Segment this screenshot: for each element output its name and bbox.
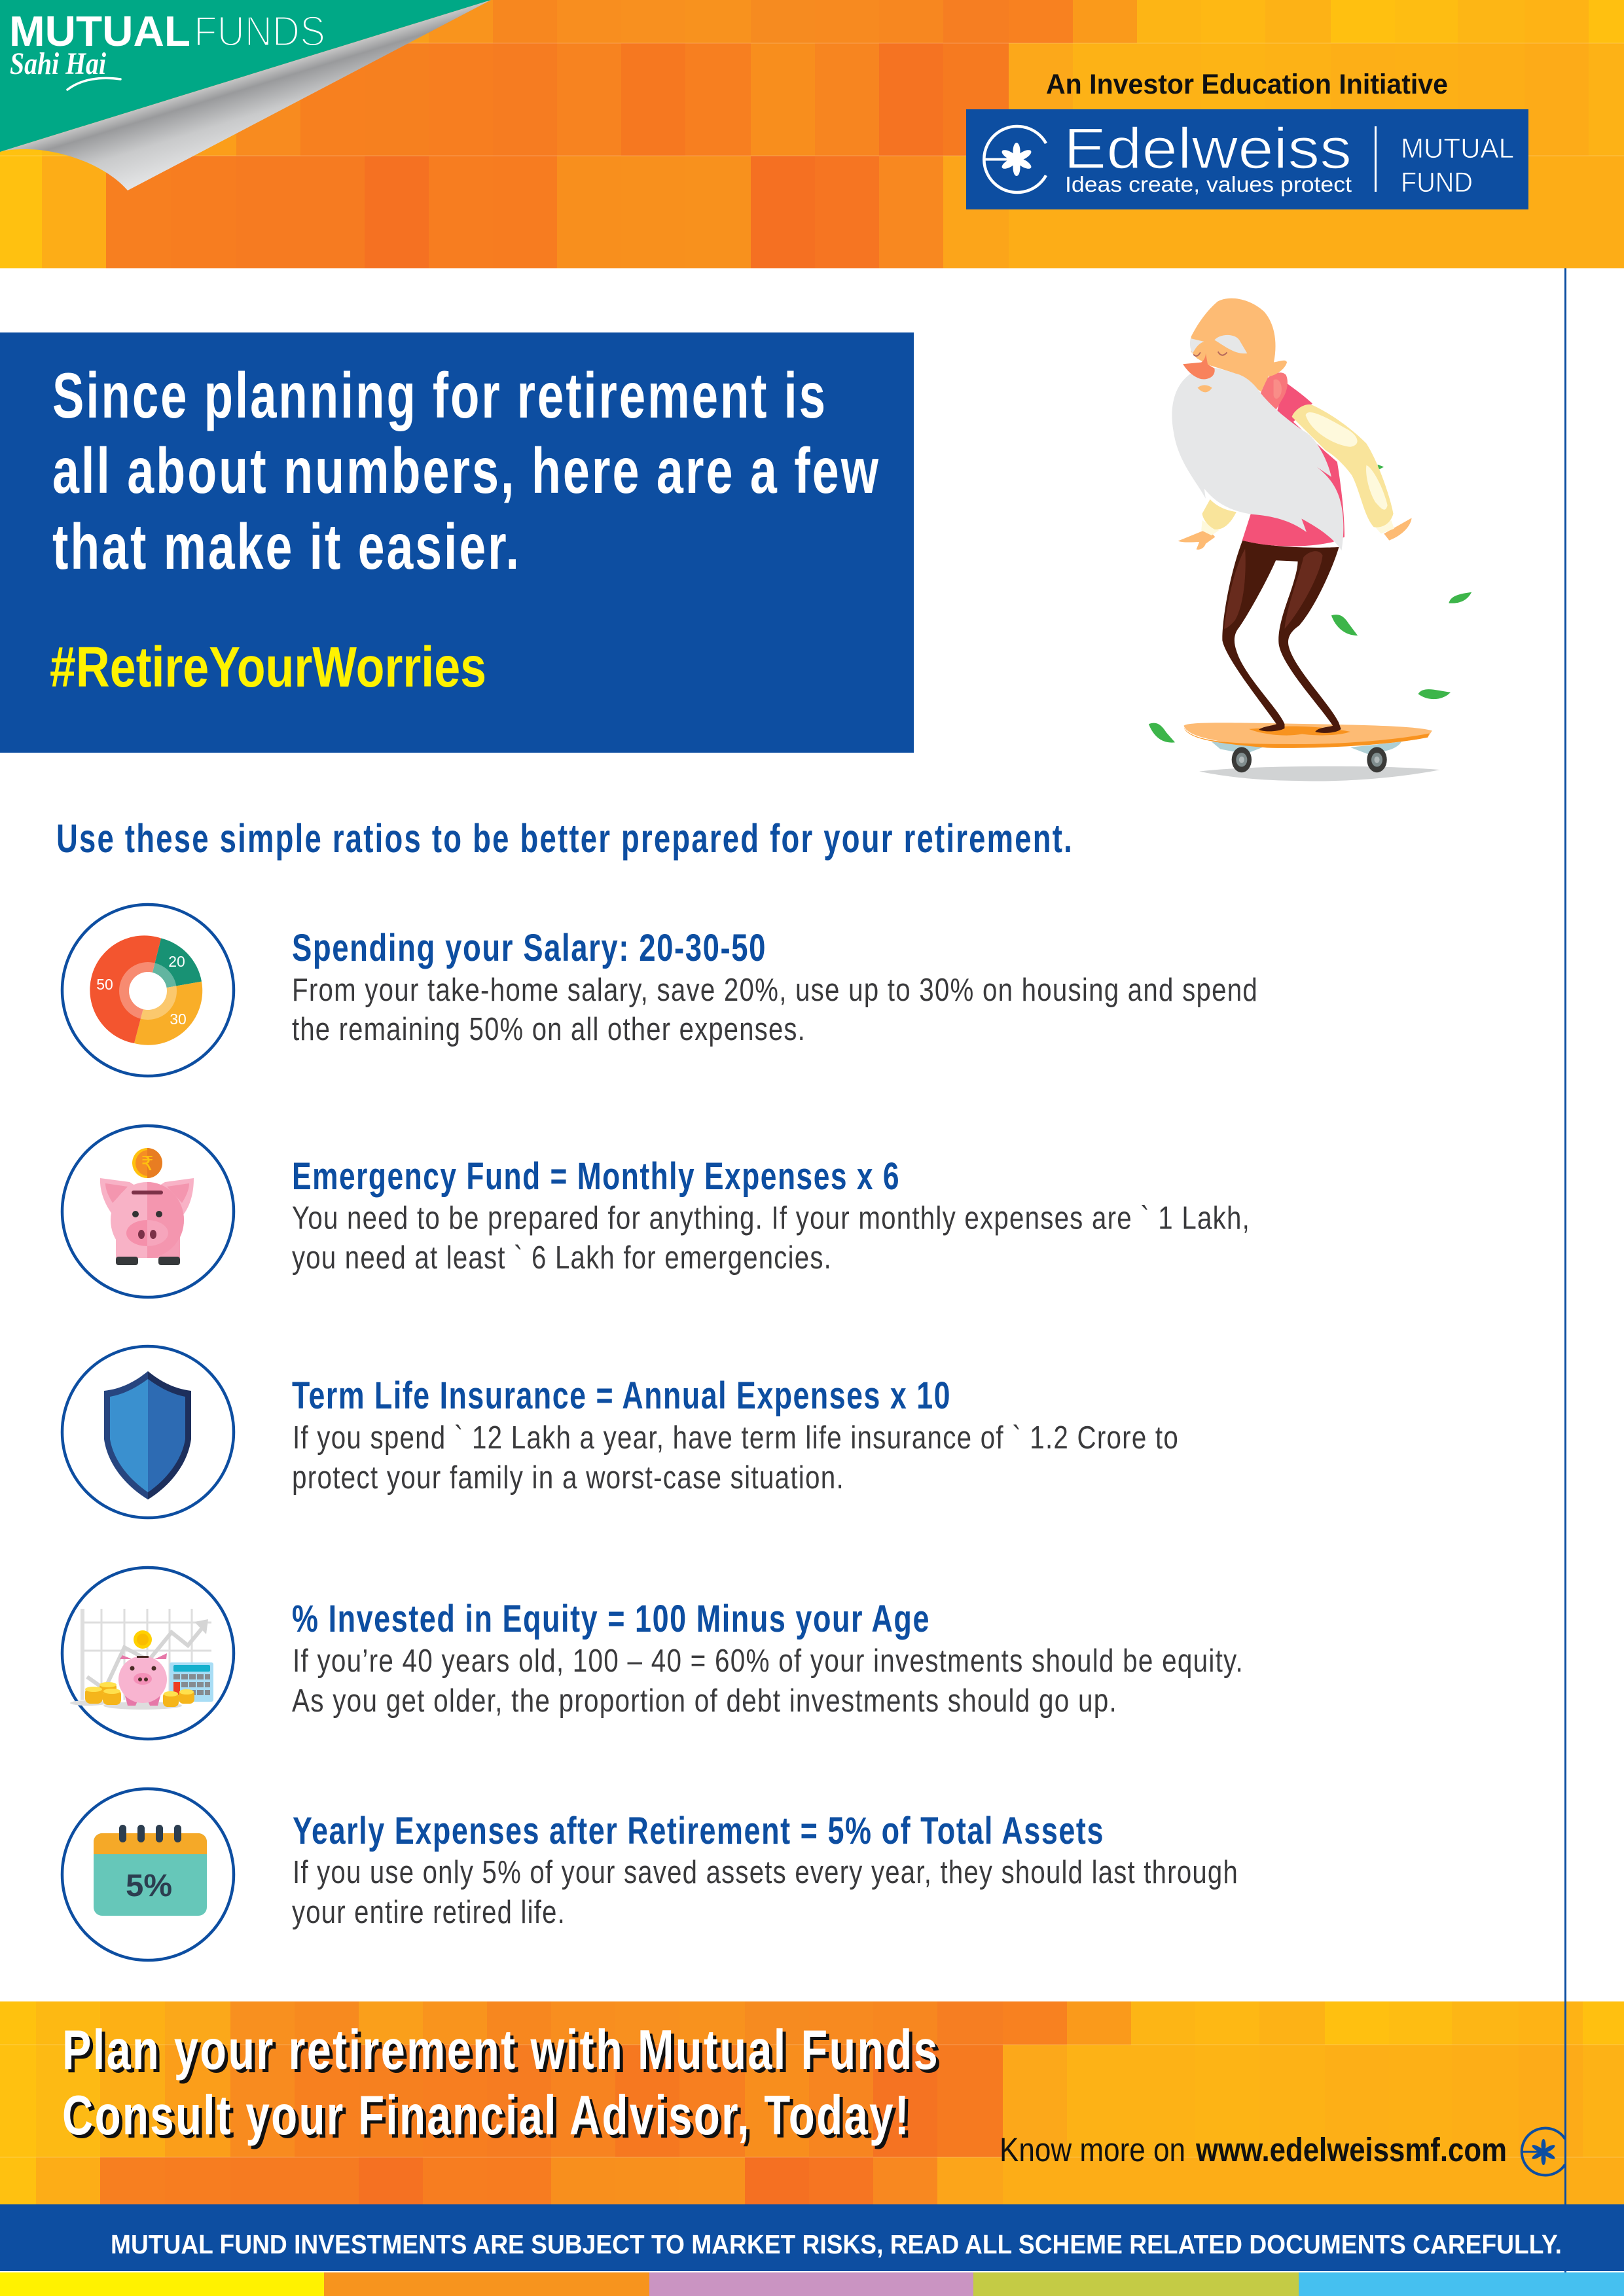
trousers (1222, 541, 1341, 733)
vertical rule over banner (1564, 2001, 1566, 2205)
call-to-action banner (0, 2001, 1624, 2204)
disclaimer bar (0, 2204, 1624, 2271)
left arm (1178, 499, 1236, 550)
illustration: old man on skateboard (1149, 298, 1471, 781)
description (292, 1643, 1244, 1719)
description (292, 1855, 1238, 1930)
ratio 2: emergency fund (62, 1126, 1250, 1297)
vertical rule (1564, 268, 1566, 2272)
green corner flag (0, 0, 491, 152)
skateboard (1183, 723, 1432, 772)
description: If you use only 5% of your saved assets every year, they should last through (293, 1855, 1238, 1890)
heading: Spending your Salary: 20-30-50 (292, 927, 767, 969)
banner text (62, 2019, 939, 2147)
icon: donut chart: 50 (96, 976, 113, 993)
subheading: Use these simple ratios to be better prepared for your retirement. (56, 816, 1074, 861)
banner text: Consult your Financial Advisor, Today! (62, 2085, 911, 2147)
description (292, 1200, 1250, 1276)
ratio 5: yearly expenses after retirement (62, 1789, 1238, 1960)
description: the remaining 50% on all other expenses. (292, 1012, 806, 1047)
hashtag: #RetireYourWorries (50, 636, 486, 699)
logo: Mutual Funds Sahi Hai (9, 7, 325, 90)
website line (1000, 2131, 1507, 2168)
emblem (984, 126, 1046, 192)
Edelweiss logo box: MUTUAL (1401, 133, 1514, 164)
small emblem (1521, 2128, 1565, 2175)
website line: www.edelweissmf.com (1195, 2131, 1507, 2168)
heading: Yearly Expenses after Retirement = 5% of Total Assets (293, 1810, 1104, 1852)
ratio 3: term life insurance (62, 1346, 1179, 1518)
right arm (1292, 404, 1412, 541)
banner text shadow: Plan your retirement with Mutual Funds (65, 2022, 943, 2085)
description: your entire retired life. (292, 1895, 566, 1930)
Edelweiss logo box: FUND (1401, 167, 1473, 198)
banner text shadow (65, 2022, 943, 2150)
initiative caption: An Investor Education Initiative (1046, 69, 1448, 100)
icon: donut chart: 30 (170, 1011, 187, 1028)
head (1191, 298, 1287, 392)
description: you need at least ` 6 Lakh for emergencies. (292, 1240, 832, 1276)
headline panel (0, 332, 914, 753)
heading: % Invested in Equity = 100 Minus your Age (292, 1598, 930, 1640)
icon: pig with chart and calculator (62, 1568, 234, 1739)
beard (1172, 367, 1343, 550)
icon: piggy bank: ₹ (141, 1153, 154, 1175)
headline panel: all about numbers, here are a few (52, 435, 880, 507)
description: From your take-home salary, save 20%, use up to 30% on housing and spend (292, 973, 1258, 1008)
header banner (0, 0, 1624, 268)
heading: Term Life Insurance = Annual Expenses x 10 (292, 1374, 951, 1417)
Edelweiss logo box: Ideas create, values protect (1065, 172, 1352, 196)
colour strip (0, 2272, 1624, 2296)
description: You need to be prepared for anything. If your monthly expenses are ` 1 Lakh, (292, 1200, 1250, 1236)
Edelweiss logo box (966, 109, 1528, 209)
website line: Know more on (1000, 2131, 1185, 2168)
face details (1183, 335, 1247, 392)
shirt (1242, 382, 1344, 547)
Edelweiss logo box: Edelweiss (1064, 116, 1352, 181)
icon: calendar 5% (62, 1789, 234, 1960)
logo: Mutual Funds Sahi Hai: FUNDS (194, 7, 325, 55)
description (292, 973, 1258, 1047)
icon: shield (62, 1346, 234, 1518)
description: If you’re 40 years old, 100 – 40 = 60% of your investments should be equity. (293, 1643, 1244, 1679)
icon: donut chart (62, 905, 234, 1076)
banner text: Plan your retirement with Mutual Funds (62, 2019, 939, 2081)
description: protect your family in a worst-case situation. (292, 1460, 844, 1496)
page curl (0, 0, 491, 190)
ground shadow (1199, 766, 1440, 781)
icon: piggy bank (62, 1126, 234, 1297)
ratio 1: spending your salary (62, 905, 1258, 1076)
icon: calendar 5%: 5% (126, 1869, 172, 1903)
banner text shadow: Consult your Financial Advisor, Today! (65, 2088, 914, 2150)
leaves (1149, 465, 1471, 743)
ratio 4: percent invested in equity (62, 1568, 1244, 1739)
logo: Mutual Funds Sahi Hai: MUTUAL (9, 7, 190, 55)
icon: donut chart: 20 (168, 953, 185, 970)
headline panel: that make it easier. (52, 511, 521, 583)
heading: Emergency Fund = Monthly Expenses x 6 (292, 1155, 900, 1198)
logo: Mutual Funds Sahi Hai: Sahi Hai (10, 46, 107, 81)
description: If you spend ` 12 Lakh a year, have term life insurance of ` 1.2 Crore to (293, 1420, 1179, 1456)
description: As you get older, the proportion of debt investments should go up. (292, 1683, 1117, 1719)
description (292, 1420, 1179, 1496)
headline panel: Since planning for retirement is (52, 359, 827, 431)
